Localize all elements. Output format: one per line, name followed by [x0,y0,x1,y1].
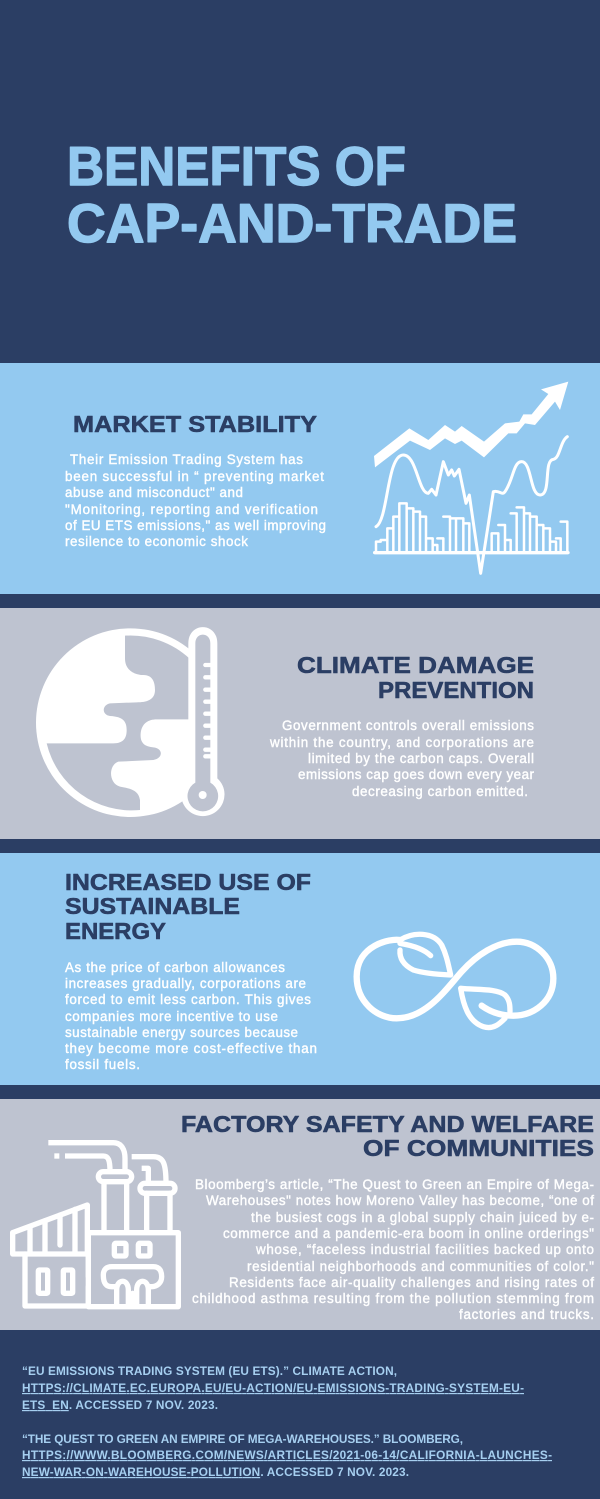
text block: sustainable energy: companies more incentive to use [65,1009,278,1024]
heading: increased use of sustainable energy: INCREASED USE OF [65,869,311,895]
references: “THE QUEST TO GREEN AN EMPIRE OF MEGA-WAREHOUSES.” BLOOMBERG, [22,1432,463,1446]
references: ETS_EN. ACCESSED 7 NOV. 2023. [22,1398,218,1412]
heading: market stability: MARKET STABILITY [73,411,317,437]
text block: market stability: resilence to economic shock [65,534,248,549]
text block: factory safety: whose, “faceless industrial facilities backed up onto [255,1242,594,1257]
text block: factory safety: residential neighborhoods and communities of color." [247,1259,594,1274]
text block: factory safety: the busiest cogs in a global supply chain juiced by e- [251,1210,594,1225]
references [22,1364,552,1479]
text block: factory safety: commerce and a pandemic-era boom in online orderings" [223,1226,594,1241]
heading: climate damage prevention: PREVENTION [378,677,534,703]
text block: sustainable energy: sustainable energy sources because [65,1025,298,1040]
text block: market stability: Their Emission Trading System has [70,452,303,467]
text block: climate damage prevention [269,718,535,799]
text block: factory safety: factories and trucks. [459,1307,594,1322]
text block: climate damage prevention: limited by the carbon caps. Overall [308,751,534,766]
title: BENEFITS OF [67,135,406,197]
icon: market chart with rising arrow [374,382,568,573]
heading: climate damage prevention: CLIMATE DAMAGE [297,652,534,678]
text block: sustainable energy: forced to emit less carbon. This gives [65,992,311,1007]
text block: market stability: been successful in “ preventing market [65,469,324,484]
text block: market stability: "Monitoring, reporting and verification [65,502,318,517]
heading: increased use of sustainable energy: SUSTAINABLE [65,893,240,919]
text block: factory safety: Bloomberg’s article, “The Quest to Green an Empire of Mega- [195,1177,594,1192]
text block: sustainable energy: fossil fuels. [65,1057,140,1072]
text block: factory safety: Residents face air-quality challenges and rising rates of [229,1275,594,1290]
text block: sustainable energy: As the price of carbon allowances [65,960,285,975]
panel: factory safety and welfare of communities [0,1099,600,1330]
heading: factory safety [181,1111,594,1161]
icon: factory [13,1143,178,1307]
panel: market stability [0,363,600,594]
heading: factory safety: OF COMMUNITIES [363,1135,594,1161]
panel: climate damage prevention [0,608,600,839]
text block: sustainable energy: increases gradually, corporations are [65,976,306,991]
text block: factory safety [192,1177,594,1322]
text block: market stability: of EU ETS emissions," as well improving [65,518,326,533]
text block: sustainable energy: they become more cost-effective than [65,1041,317,1056]
text block: factory safety: Warehouses" notes how Moreno Valley has become, “one of [206,1193,594,1208]
heading: increased use of sustainable energy: ENERGY [65,918,166,944]
panel: increased use of sustainable energy [0,853,600,1085]
icon: globe with thermometer [36,627,225,817]
text block: climate damage prevention: emissions cap goes down every year [298,767,535,782]
references: “EU EMISSIONS TRADING SYSTEM (EU ETS).” CLIMATE ACTION, [22,1364,397,1378]
heading: increased use of sustainable energy [65,869,311,944]
references: HTTPS://CLIMATE.EC.EUROPA.EU/EU-ACTION/EU-EMISSIONS-TRADING-SYSTEM-EU- [22,1381,524,1395]
text block: factory safety: childhood asthma resulting from the pollution stemming from [192,1291,594,1306]
heading: factory safety: FACTORY SAFETY AND WELFARE [181,1111,594,1137]
text block: market stability: abuse and misconduct" and [65,485,243,500]
text block: climate damage prevention: within the country, and corporations are [269,735,534,750]
text block: climate damage prevention: Government controls overall emissions [282,718,534,733]
references: NEW-WAR-ON-WAREHOUSE-POLLUTION. ACCESSED 7 NOV. 2023. [22,1465,409,1479]
icon: infinity loop with leaves [357,934,553,1028]
references: HTTPS://WWW.BLOOMBERG.COM/NEWS/ARTICLES/2021-06-14/CALIFORNIA-LAUNCHES- [22,1448,552,1462]
title: CAP-AND-TRADE [67,192,517,254]
text block: climate damage prevention: decreasing carbon emitted. [352,784,528,799]
text block: sustainable energy [65,960,317,1072]
heading: climate damage prevention [297,652,534,703]
title [67,135,517,254]
text block: market stability [65,452,326,549]
